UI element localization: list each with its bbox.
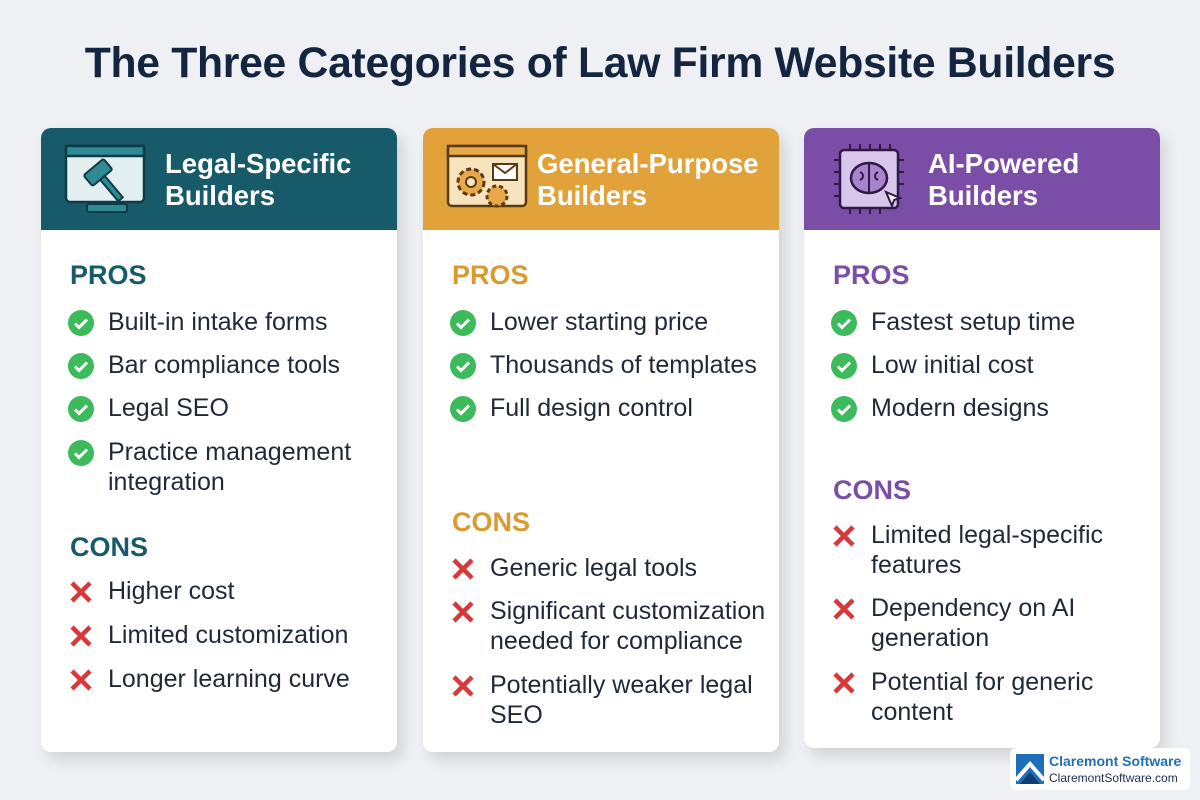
pros list — [68, 308, 351, 496]
panel: ai-powered: Fastest setup time — [871, 308, 1075, 336]
cons heading: CONS — [833, 475, 911, 505]
header: general-purpose: Builders — [537, 180, 647, 211]
cons heading: CONS — [70, 532, 148, 562]
cons list — [452, 554, 765, 729]
panel: ai-powered: Potential for generic — [871, 668, 1093, 696]
panel: legal-specific: Bar compliance tools — [108, 351, 340, 379]
panel: legal-specific: Legal SEO — [108, 394, 229, 422]
panel: general-purpose: Significant customization — [490, 597, 765, 625]
header: ai-powered: Builders — [928, 180, 1038, 211]
logo: Claremont Software: ClaremontSoftware.com — [1049, 771, 1178, 785]
panel: ai-powered: generation — [871, 624, 989, 652]
panel: ai-powered: Dependency on AI — [871, 594, 1075, 622]
panel: ai-powered: Modern designs — [871, 394, 1049, 422]
logo: Claremont Software: Claremont Software — [1049, 753, 1181, 769]
logo: Claremont Software — [1010, 748, 1190, 790]
panel: ai-powered: features — [871, 551, 961, 579]
panel: ai-powered: content — [871, 698, 953, 726]
panel: legal-specific: Practice management — [108, 438, 351, 466]
panel: ai-powered: Low initial cost — [871, 351, 1034, 379]
pros heading: PROS — [833, 260, 910, 290]
pros heading: PROS — [70, 260, 147, 290]
icon: brain chip — [834, 144, 904, 214]
panel: general-purpose: Potentially weaker legal — [490, 671, 753, 699]
cons list — [70, 577, 350, 693]
title: The Three Categories of Law Firm Website Builders — [85, 39, 1115, 87]
panel: legal-specific: Longer learning curve — [108, 665, 350, 693]
panel: general-purpose — [423, 128, 779, 752]
icon: gears on screen — [446, 144, 528, 208]
panel: general-purpose: Thousands of templates — [490, 351, 757, 379]
pros list — [450, 308, 757, 422]
cons list — [834, 521, 1103, 726]
panel: legal-specific — [41, 128, 397, 752]
pros heading: PROS — [452, 260, 529, 290]
header: legal-specific: Builders — [165, 180, 275, 211]
panel: ai-powered: Limited legal-specific — [871, 521, 1103, 549]
header: legal-specific: Legal-Specific — [165, 148, 351, 179]
panel: legal-specific: Higher cost — [108, 577, 234, 605]
header: ai-powered: AI-Powered — [928, 148, 1079, 179]
header: general-purpose: General-Purpose — [537, 148, 759, 179]
panel: ai-powered — [804, 128, 1160, 748]
panel: legal-specific: Limited customization — [108, 621, 348, 649]
panel: general-purpose: Full design control — [490, 394, 693, 422]
panel: general-purpose: Generic legal tools — [490, 554, 697, 582]
panel: general-purpose: SEO — [490, 701, 543, 729]
pros list — [831, 308, 1075, 422]
panel: general-purpose: Lower starting price — [490, 308, 708, 336]
icon: gavel on screen — [64, 144, 146, 213]
panel: general-purpose: needed for compliance — [490, 627, 743, 655]
panel: legal-specific: integration — [108, 468, 225, 496]
header: general-purpose — [423, 128, 779, 230]
cons heading: CONS — [452, 507, 530, 537]
icon: logo mark — [1016, 754, 1044, 784]
panel: legal-specific: Built-in intake forms — [108, 308, 328, 336]
header: ai-powered — [804, 128, 1160, 230]
header: legal-specific — [41, 128, 397, 230]
